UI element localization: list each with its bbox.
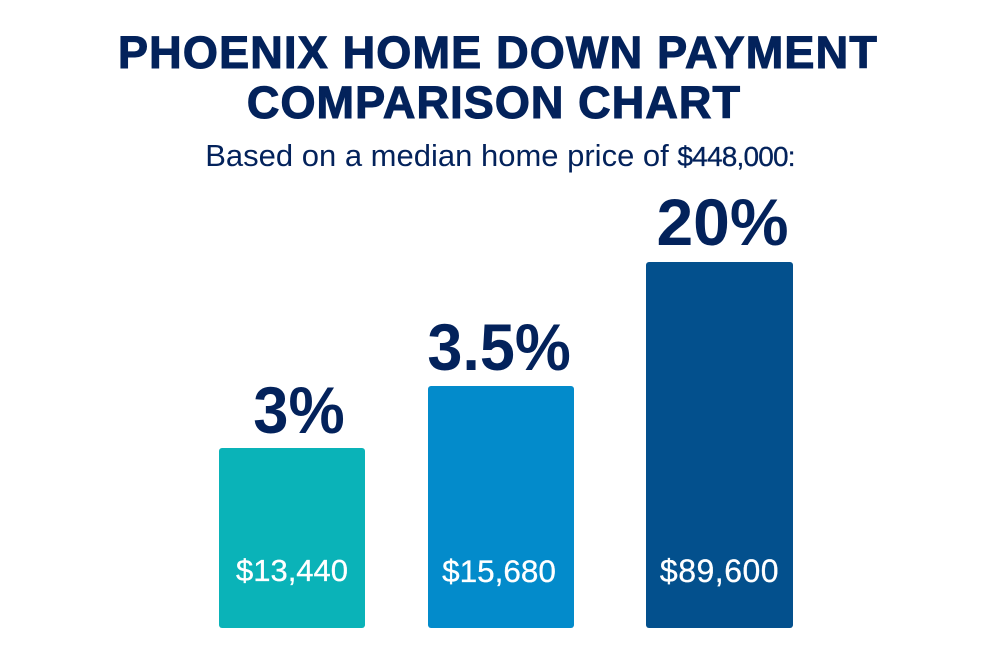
bar: 20% [646,262,793,628]
value: $13,440: $13,440 [236,553,348,588]
bar chart [219,185,793,628]
subtitle: Based on a median home price of $448,000: [205,138,795,173]
title: COMPARISON CHART [247,77,741,128]
title [118,27,878,128]
label: 3%: 3% [253,373,345,447]
value: $15,680: $15,680 [442,553,556,589]
bar: 3% [219,448,365,628]
label: 20%: 20% [656,185,789,259]
bar: 3.5% [428,386,574,628]
title: PHOENIX HOME DOWN PAYMENT [118,27,878,78]
value: $89,600: $89,600 [660,553,779,589]
label: 3.5%: 3.5% [427,310,571,384]
